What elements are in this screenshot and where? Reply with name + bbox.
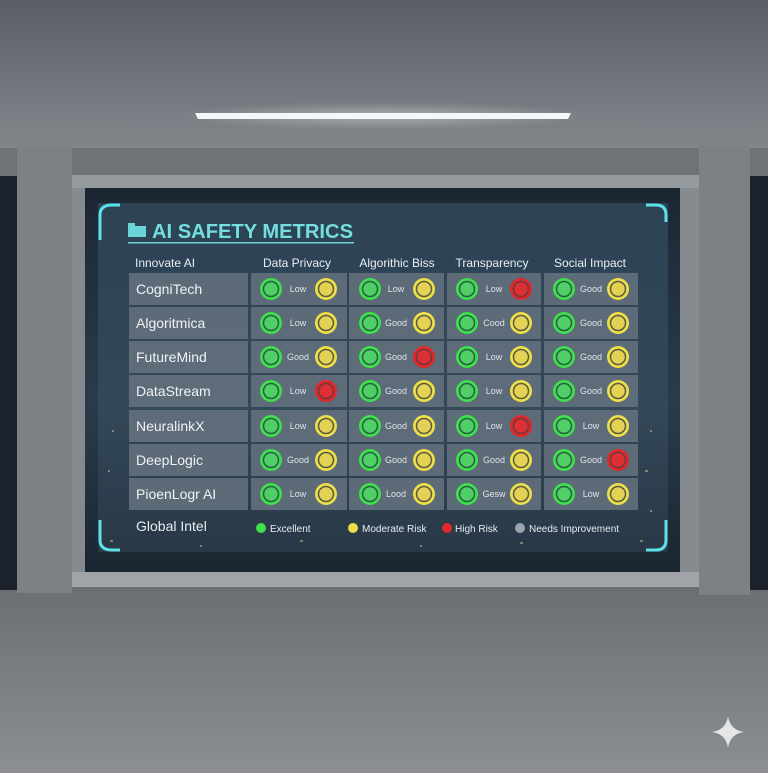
table: CogniTech: [136, 281, 202, 297]
table: Lood: [386, 489, 406, 499]
screen panel: [98, 203, 668, 552]
table: Low: [583, 489, 600, 499]
header row: [135, 256, 627, 270]
table: DataStream: [136, 383, 211, 399]
legend: Excellent: [270, 524, 311, 535]
icon: folder: [128, 223, 146, 237]
side windows: [0, 175, 17, 590]
floor: [0, 588, 768, 773]
table: Good: [483, 455, 505, 465]
table: Gesw: [482, 489, 506, 499]
table: DeepLogic: [136, 452, 203, 468]
table: Good: [580, 455, 602, 465]
legend: Moderate Risk: [362, 524, 427, 535]
legend: [136, 518, 619, 535]
table: Low: [388, 284, 405, 294]
header row: Transparency: [456, 256, 528, 270]
table: Good: [385, 421, 407, 431]
icon: sparkle: [712, 716, 744, 748]
table: Cood: [483, 318, 505, 328]
header row: Innovate AI: [135, 256, 195, 270]
table: Good: [287, 352, 309, 362]
table: Good: [580, 386, 602, 396]
table: Low: [486, 386, 503, 396]
table: Good: [385, 455, 407, 465]
header row: Social Impact: [554, 256, 627, 270]
table: Good: [287, 455, 309, 465]
table: Good: [580, 352, 602, 362]
table: Algoritmica: [136, 315, 205, 331]
table: Low: [290, 318, 307, 328]
table: Good: [580, 318, 602, 328]
table: Low: [290, 284, 307, 294]
header row: Algorithic Biss: [359, 256, 435, 270]
legend: Global Intel: [136, 518, 207, 534]
table: [129, 273, 638, 510]
table: Low: [583, 421, 600, 431]
table: Good: [385, 352, 407, 362]
table: Good: [580, 284, 602, 294]
table: PioenLogr AI: [136, 486, 216, 502]
table: Low: [486, 284, 503, 294]
beam: [0, 148, 768, 176]
table: Low: [290, 421, 307, 431]
ceiling light: [173, 102, 593, 130]
title: AI SAFETY METRICS: [152, 221, 353, 243]
pillar right: [699, 145, 750, 595]
table: FutureMind: [136, 349, 207, 365]
legend: Needs Improvement: [529, 524, 619, 535]
table: Low: [290, 489, 307, 499]
window sill: [72, 572, 702, 587]
table: Low: [290, 386, 307, 396]
table: Good: [385, 386, 407, 396]
legend: High Risk: [455, 524, 499, 535]
table: NeuralinkX: [136, 418, 205, 434]
table: Low: [486, 352, 503, 362]
table: Low: [486, 421, 503, 431]
window frame: [72, 175, 702, 587]
ceiling: [0, 0, 768, 150]
pillar left: [17, 145, 72, 593]
window city view: [85, 188, 680, 572]
header row: Data Privacy: [263, 256, 331, 270]
table: Good: [385, 318, 407, 328]
